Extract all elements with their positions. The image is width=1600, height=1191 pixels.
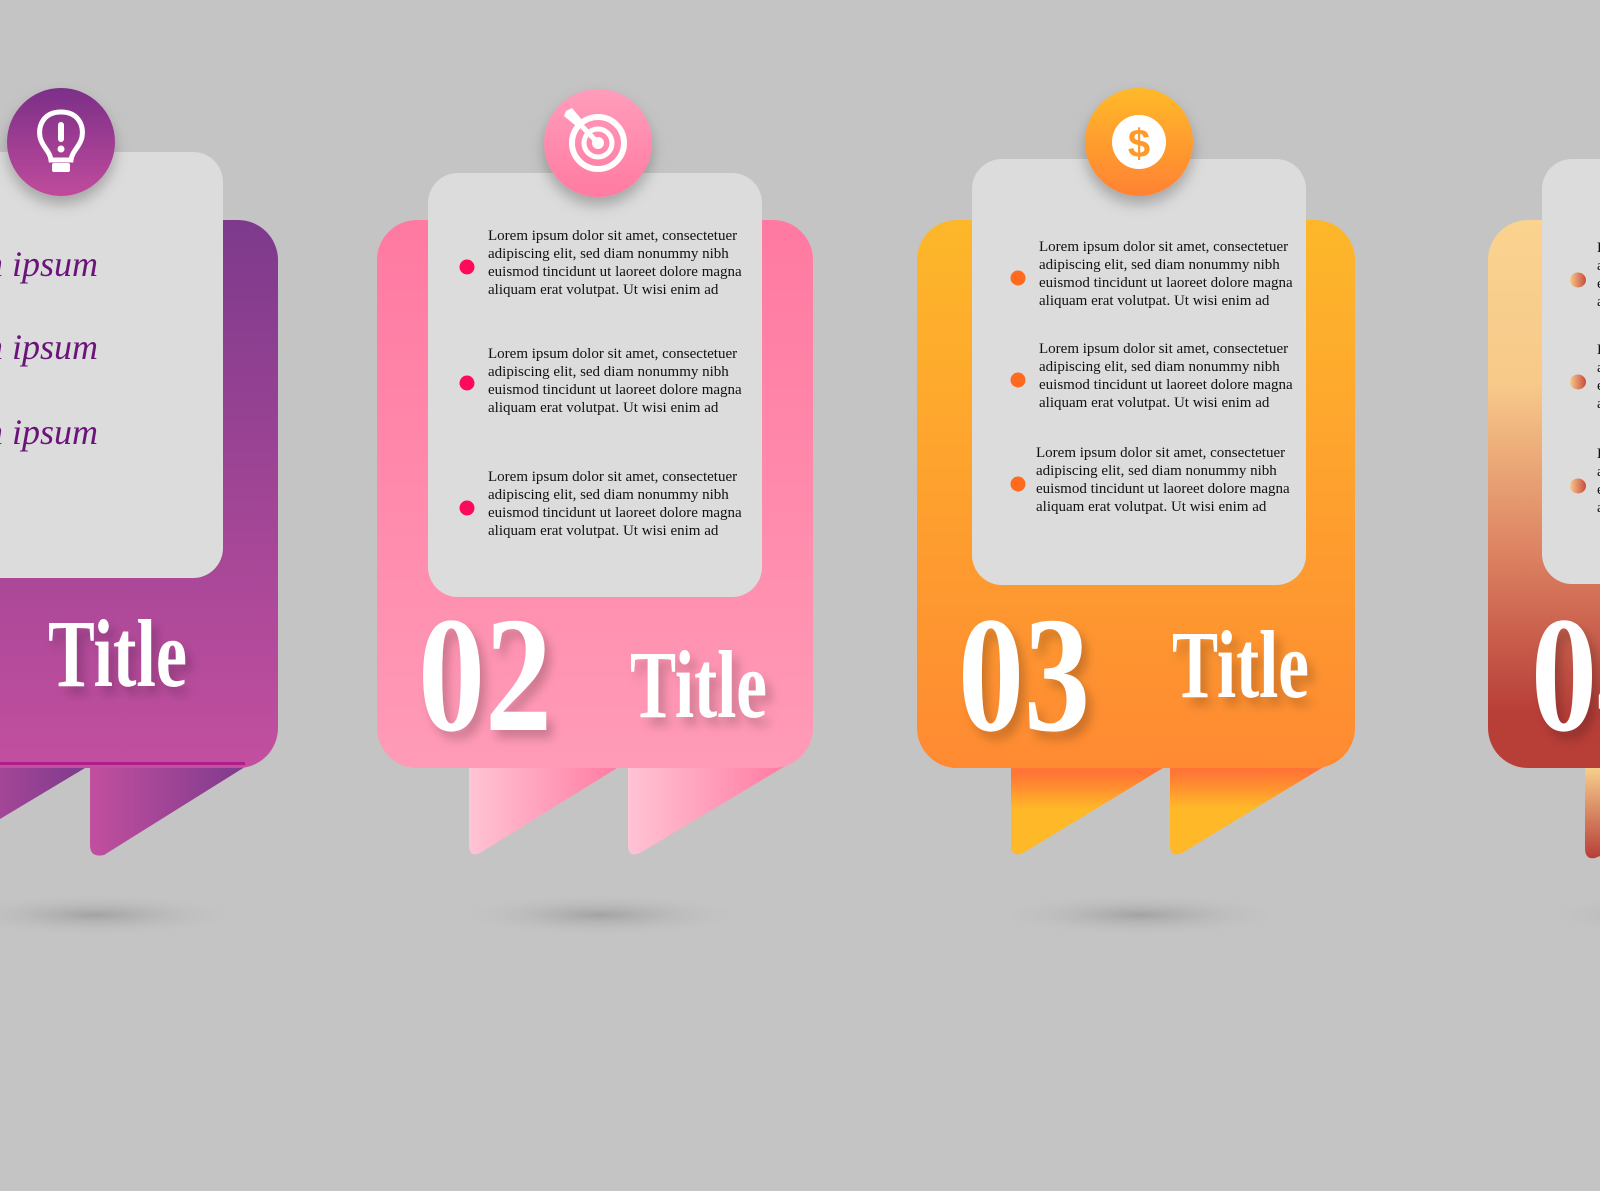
icon: dollar coin xyxy=(1085,88,1193,196)
bullet list 3: adipiscing elit, sed diam nonummy nibh xyxy=(1039,359,1280,375)
text panel 2 xyxy=(428,173,762,597)
tabs 1 xyxy=(0,765,248,856)
tabs 3 xyxy=(1011,763,1330,854)
script items 1 xyxy=(0,244,98,452)
title 2: Title xyxy=(630,631,767,738)
tabs 2 xyxy=(469,765,787,854)
back panel 4 xyxy=(1488,220,1600,768)
card 3: orange xyxy=(917,88,1355,937)
back panel 2 xyxy=(377,220,813,768)
bullet list 4 xyxy=(1570,240,1600,516)
back panel 3 xyxy=(917,220,1355,768)
shadow 4 xyxy=(1540,893,1600,937)
shadow 3 xyxy=(990,893,1290,937)
title 3: Title xyxy=(1172,611,1309,718)
number 03: 03 xyxy=(958,583,1090,766)
card 2: pink xyxy=(377,89,813,937)
bullet list 2: aliquam erat volutpat. Ut wisi enim ad xyxy=(488,282,719,298)
bullet list 2: adipiscing elit, sed diam nonummy nibh xyxy=(488,364,729,380)
bullet list 3: euismod tincidunt ut laoreet dolore magna xyxy=(1039,377,1293,393)
text panel 3 xyxy=(972,159,1306,585)
shadow 2 xyxy=(450,893,750,937)
bullet list 3: euismod tincidunt ut laoreet dolore magna xyxy=(1036,481,1290,497)
icon: lightbulb xyxy=(7,88,115,196)
bullet list 3 xyxy=(1010,239,1293,515)
bullet list 3: adipiscing elit, sed diam nonummy nibh xyxy=(1036,463,1277,479)
tab 4 xyxy=(1585,765,1600,858)
bullet list 2: euismod tincidunt ut laoreet dolore magna xyxy=(488,382,742,398)
bullet list 2: adipiscing elit, sed diam nonummy nibh xyxy=(488,487,729,503)
title 1: Title xyxy=(48,600,187,707)
bullet list 2: aliquam erat volutpat. Ut wisi enim ad xyxy=(488,523,719,539)
icon: dollar coin: $ xyxy=(1128,122,1150,166)
text panel 4 xyxy=(1542,159,1600,584)
bullet list 3: Lorem ipsum dolor sit amet, consectetuer xyxy=(1039,239,1288,255)
bullet list 2: aliquam erat volutpat. Ut wisi enim ad xyxy=(488,400,719,416)
card 4: peach-red xyxy=(1488,159,1600,937)
back panel 1 xyxy=(0,220,278,768)
bullet list 2: euismod tincidunt ut laoreet dolore magna xyxy=(488,264,742,280)
bullet list 2: Lorem ipsum dolor sit amet, consectetuer xyxy=(488,228,737,244)
number 02: 02 xyxy=(418,583,552,766)
bullet list 2: Lorem ipsum dolor sit amet, consectetuer xyxy=(488,346,737,362)
icon: target xyxy=(544,89,652,197)
bullet list 2 xyxy=(460,228,742,539)
bullet list 2: euismod tincidunt ut laoreet dolore magna xyxy=(488,505,742,521)
bullet list 3: aliquam erat volutpat. Ut wisi enim ad xyxy=(1036,499,1267,515)
text panel 1 xyxy=(0,152,223,578)
bullet list 3: adipiscing elit, sed diam nonummy nibh xyxy=(1039,257,1280,273)
bullet list 3: euismod tincidunt ut laoreet dolore magna xyxy=(1039,275,1293,291)
bullet list 3: aliquam erat volutpat. Ut wisi enim ad xyxy=(1039,395,1270,411)
bullet list 3: Lorem ipsum dolor sit amet, consectetuer xyxy=(1036,445,1285,461)
bullet list 3: Lorem ipsum dolor sit amet, consectetuer xyxy=(1039,341,1288,357)
bullet list 2: Lorem ipsum dolor sit amet, consectetuer xyxy=(488,469,737,485)
card 1: purple xyxy=(0,88,278,937)
shadow 1 xyxy=(0,893,245,937)
bullet list 2: adipiscing elit, sed diam nonummy nibh xyxy=(488,246,729,262)
bullet list 3: aliquam erat volutpat. Ut wisi enim ad xyxy=(1039,293,1270,309)
